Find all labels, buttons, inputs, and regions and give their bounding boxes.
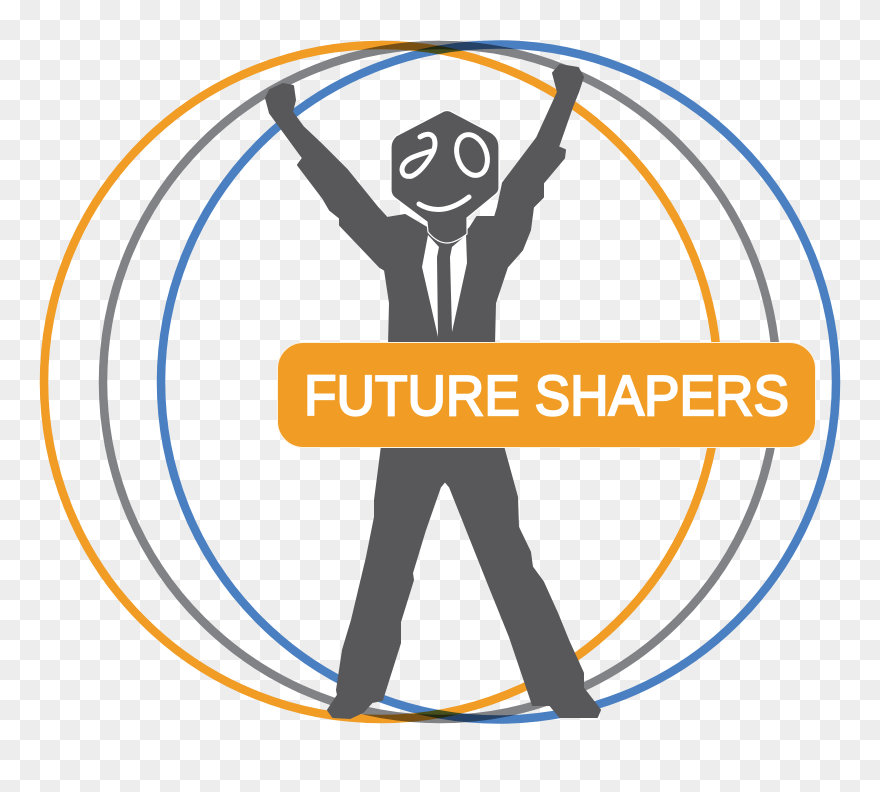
head: [391, 110, 499, 243]
three overlapping rings: [44, 44, 836, 720]
orange name badge: [278, 342, 816, 448]
left eye: [402, 134, 435, 176]
gray ring: [103, 45, 777, 719]
right eye: [451, 130, 493, 180]
smile: [419, 197, 469, 209]
orange ring: [44, 45, 718, 719]
badge title: FUTURE SHAPERS: [304, 364, 789, 428]
shirt left of tie: [422, 235, 439, 337]
torso and arms: [266, 65, 583, 345]
figure: man in suit with raised arms: [266, 65, 600, 718]
legs and shoes: [328, 446, 600, 718]
badge background: [278, 342, 816, 448]
blue ring: [161, 44, 836, 720]
shirt right of tie: [450, 235, 467, 332]
